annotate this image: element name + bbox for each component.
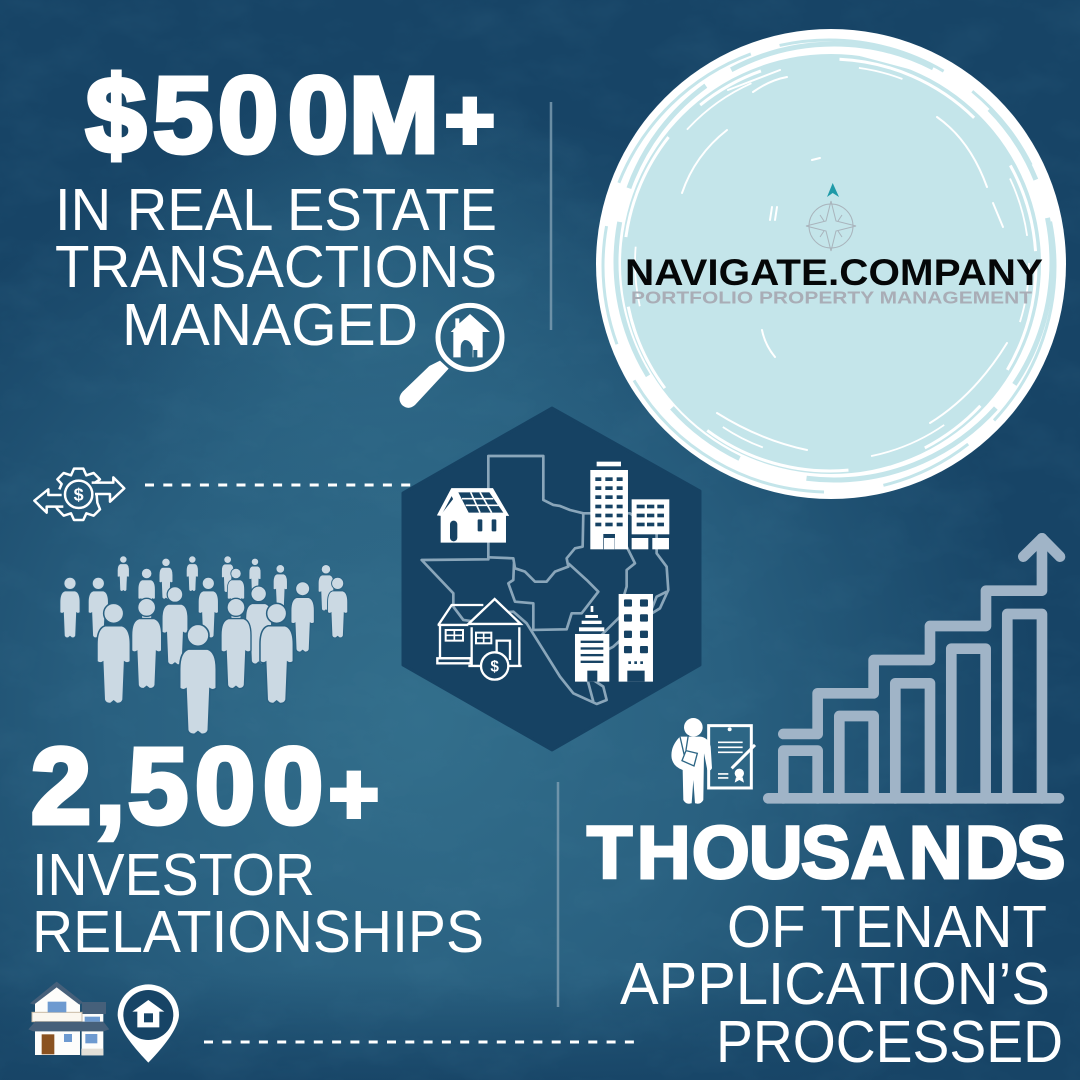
icon: gear with dollar and arrows [34, 469, 124, 520]
divider: bottom vertical [557, 782, 559, 1007]
dashed connector: lower [204, 1040, 636, 1044]
divider: top vertical [550, 102, 552, 330]
Texas map outline [422, 456, 668, 704]
text: of tenant application's processed: PROCESSED [716, 1009, 1063, 1075]
heading: 2,500+: + [329, 747, 379, 842]
text: investor relationships: RELATIONSHIPS [32, 899, 484, 965]
logo tagline: PORTFOLIO PROPERTY MANAGEMENT [631, 288, 1032, 308]
heading: $500M+: $500M [86, 54, 439, 175]
icon: teal arrow [827, 183, 839, 197]
icon: solar house [438, 489, 508, 543]
text: of tenant application's processed: APPLICATION’S [620, 951, 1050, 1017]
icon: colored house [28, 982, 109, 1055]
logo circle panel [596, 29, 1066, 499]
text: in real estate transactions managed [55, 177, 497, 358]
brush marks on circle [603, 40, 1055, 492]
text: investor relationships [32, 842, 484, 965]
icon: houses with dollar badge: $ [490, 659, 499, 676]
text: investor relationships: INVESTOR [32, 842, 315, 908]
text: of tenant application's processed [620, 894, 1063, 1075]
logo wordmark: NAVIGATE.COMPANY [625, 251, 1043, 293]
text: in real estate transactions managed: MANAGED [122, 292, 418, 358]
icon: houses with dollar badge [437, 599, 522, 680]
icon: investor crowd [60, 556, 348, 734]
icon: office buildings [590, 462, 669, 549]
icon: magnifier with house [399, 305, 502, 408]
heading: 2,500+: 2,500 [31, 725, 323, 846]
icon: location pin with house [118, 984, 179, 1063]
heading: THOUSANDS: THOUSANDS [587, 811, 1065, 894]
icon: compass [806, 201, 856, 251]
icon: tenant with application form [671, 718, 755, 804]
chart: rising bars with arrow [768, 538, 1060, 798]
dashed connector: upper [145, 484, 412, 486]
text: in real estate transactions managed: IN REAL ESTATE [55, 177, 497, 243]
hexagon with Texas map [403, 408, 700, 750]
heading: $500M+: + [445, 73, 495, 168]
icon: gear with dollar and arrows: $ [74, 485, 84, 505]
text: in real estate transactions managed: TRANSACTIONS [55, 234, 497, 300]
icon: towers [575, 594, 653, 682]
text: of tenant application's processed: OF TENANT [727, 894, 1047, 960]
